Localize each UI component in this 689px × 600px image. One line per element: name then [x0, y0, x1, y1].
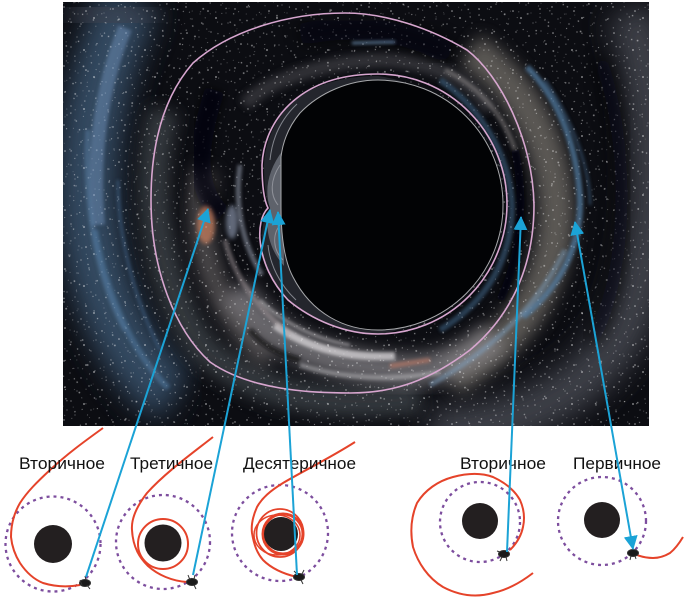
- diagram: decimal image: [232, 442, 356, 581]
- black hole: [34, 525, 72, 563]
- outer pink image contour: [151, 13, 534, 393]
- dashed orbit: [232, 485, 328, 581]
- observer 1: [80, 576, 90, 589]
- dashed orbit: [6, 496, 100, 592]
- inner pink image contour: [260, 74, 507, 334]
- winding rings: [254, 509, 304, 557]
- warm glow spot: [197, 206, 215, 244]
- arrow: tertiary to observer: [193, 210, 270, 575]
- black hole disc: [281, 80, 503, 330]
- light path: [637, 537, 683, 558]
- label: Десятеричное: [243, 454, 356, 473]
- arrow: primary to observer: [575, 222, 633, 549]
- dashed orbit: [440, 482, 520, 562]
- blue arrows: [86, 209, 633, 577]
- pale cloud: [226, 205, 238, 239]
- dark dust lanes: [201, 29, 622, 340]
- diagram: secondary image, right: [411, 454, 546, 595]
- light path: [132, 437, 213, 582]
- dust glow around the black hole: [70, 0, 655, 432]
- swirl lines: [268, 104, 297, 300]
- light path: [411, 474, 533, 595]
- black hole: [584, 502, 620, 538]
- label: Первичное: [573, 454, 661, 473]
- diagram: primary image: [558, 454, 683, 565]
- observer 3: [294, 570, 304, 584]
- winding ring: [138, 519, 188, 569]
- dashed orbit: [116, 495, 210, 589]
- arrow: right secondary to observer: [507, 217, 521, 552]
- diagram: tertiary image: [116, 437, 213, 589]
- star field: [63, 2, 649, 426]
- dashed orbit: [558, 477, 646, 565]
- black hole: [144, 524, 182, 562]
- panel: black hole space image: [63, 0, 655, 432]
- third star layer: [63, 2, 649, 426]
- observer 2: [186, 575, 198, 589]
- observer icons: [80, 550, 638, 589]
- arrow: decimal to observer: [278, 212, 297, 575]
- black hole: [462, 503, 498, 539]
- arrow: left secondary to observer: [86, 209, 208, 577]
- grey swirl beside the flattened edge: [267, 150, 284, 266]
- label: Вторичное: [19, 454, 105, 473]
- inner dark ring: [262, 76, 404, 334]
- label: Третичное: [130, 454, 213, 473]
- second star layer: [63, 2, 649, 426]
- light path: [252, 442, 355, 577]
- black hole: [264, 517, 298, 551]
- diagram: secondary image, left: [6, 428, 105, 592]
- observer 5: [628, 550, 638, 560]
- streak texture: [87, 28, 590, 388]
- light path: [11, 428, 103, 586]
- label: Вторичное: [460, 454, 546, 473]
- observer 4: [497, 550, 510, 561]
